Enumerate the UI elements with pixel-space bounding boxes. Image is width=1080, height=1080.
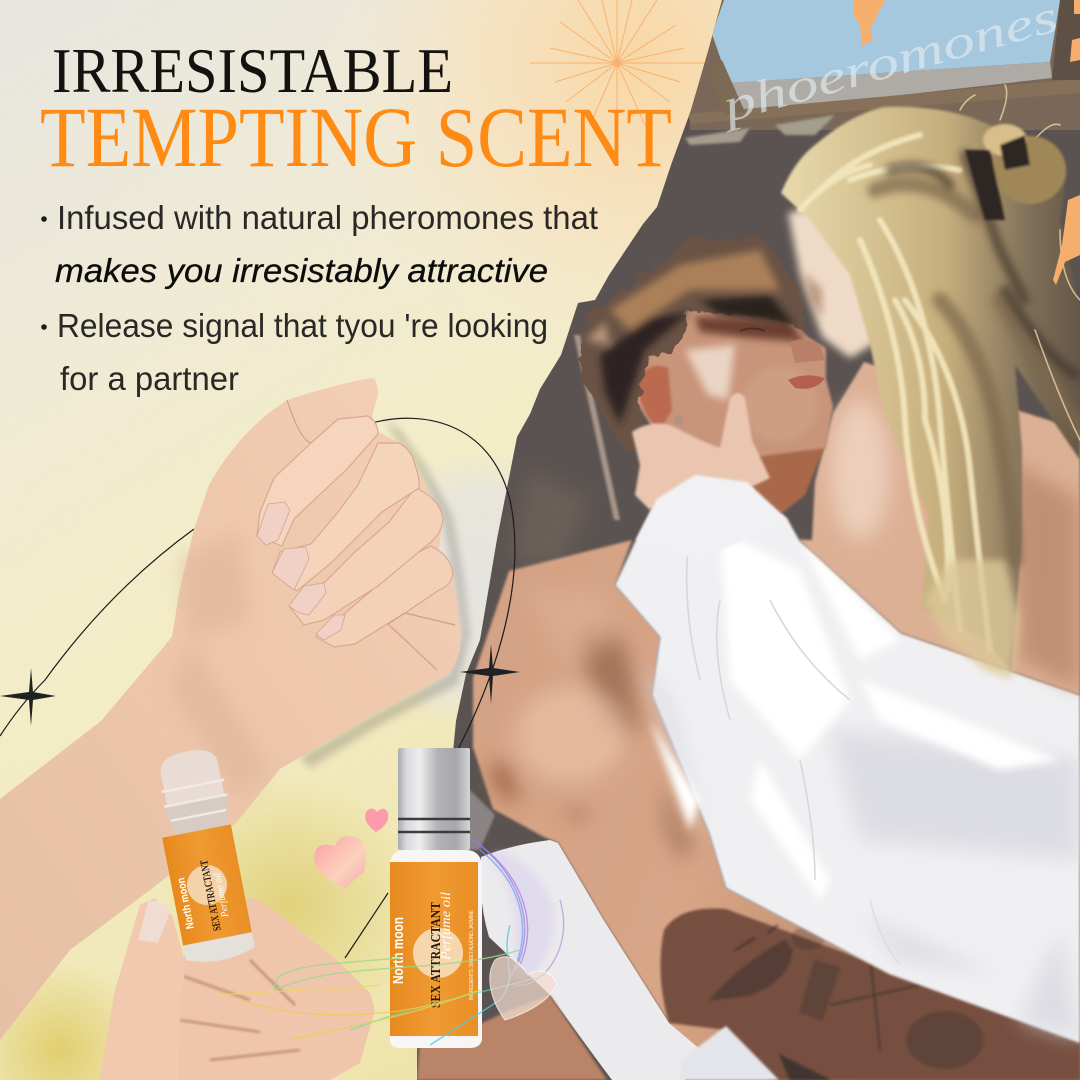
photo: robe collar over hand bbox=[636, 475, 788, 560]
photo: man's neck bbox=[752, 448, 825, 515]
holding hand: palm and fingers bbox=[100, 897, 375, 1080]
photo: hair bun bbox=[965, 124, 1066, 220]
fist: wrist shading bbox=[170, 530, 270, 800]
bottle: SEX ATTRACTANT: SEX ATTRACTANT bbox=[429, 901, 444, 1008]
bottle: peach circle bbox=[413, 928, 463, 978]
handwritten word: phoeromones: phoeromones bbox=[713, 0, 1063, 133]
photo: forearm tattoos bbox=[710, 925, 983, 1080]
fist: finger two bbox=[272, 443, 419, 591]
bullet list bbox=[41, 199, 598, 397]
roller bottle: roller ball bbox=[158, 746, 224, 806]
swirl glow bbox=[490, 850, 554, 980]
roller bottle: orange label bbox=[162, 824, 252, 946]
photo: woman's face bbox=[783, 206, 872, 362]
photo: sky window and beams bbox=[685, 0, 1080, 150]
product: main perfume bottle bbox=[390, 748, 482, 1048]
photo: man's ear and earring bbox=[638, 364, 684, 434]
decoration: black sparkle right bbox=[460, 644, 520, 704]
bottle: orange label bbox=[390, 862, 478, 1036]
photo: gray gap beside arm bbox=[468, 790, 496, 851]
photo: arm shading bbox=[488, 590, 695, 860]
scent swirl: rainbow lines bbox=[220, 838, 564, 1045]
roller bottle: label text: Perfume oil bbox=[212, 872, 232, 919]
icon: pink hearts bbox=[314, 808, 388, 888]
fist: finger one bbox=[257, 416, 378, 546]
photo: hair strands bbox=[800, 85, 1080, 650]
photo: dark wall bbox=[400, 0, 1080, 1080]
photo: hair ends over robe bbox=[925, 560, 1020, 680]
title line two: TEMPTING SCENT: TEMPTING SCENT bbox=[40, 89, 672, 185]
photo: man's body and arm bbox=[473, 540, 1080, 1080]
hand: closed fist and wrist bbox=[0, 378, 461, 1040]
photo: robe folds bbox=[640, 530, 1080, 1040]
fist: palm creases bbox=[287, 400, 455, 670]
decoration: black sparkle left bbox=[0, 668, 56, 726]
bottle: silver cap bbox=[398, 748, 470, 850]
bullet two text, first line: Release signal that tyou 're looking bbox=[57, 307, 548, 344]
photo: shadow on forearm bbox=[660, 908, 1080, 1080]
bullet one marker bbox=[41, 216, 47, 222]
photo: white robe bbox=[615, 475, 1080, 1043]
icon: translucent glass heart bbox=[490, 957, 556, 1020]
bottle: white body bbox=[390, 850, 482, 1048]
bullet two text, second line: for a partner bbox=[60, 360, 239, 397]
roller bottle: label text bbox=[173, 857, 234, 937]
fist: finger three bbox=[289, 488, 443, 625]
photo: hair highlights bbox=[586, 250, 795, 425]
photo: man's hair bbox=[581, 238, 806, 451]
photo: lighter pole at the left of the man bbox=[574, 335, 620, 520]
photo: face highlights bbox=[685, 316, 818, 443]
product: small roller bottle held in hand bbox=[100, 745, 375, 1080]
photo: man's face bbox=[635, 310, 833, 458]
photo: woman's back and shoulder bbox=[799, 362, 1080, 695]
photo: lower towel bbox=[417, 840, 779, 1080]
bottle: North moon: North moon bbox=[390, 917, 407, 984]
thumb nail bbox=[138, 900, 170, 943]
holding hand: finger creases bbox=[180, 960, 300, 1060]
roller bottle: label text: SEX ATTRACTANT bbox=[198, 858, 224, 932]
decoration: orange paint drips bbox=[853, 0, 1080, 285]
roller bottle: peach circle bbox=[184, 862, 230, 908]
roller bottle: rotated body bbox=[147, 745, 258, 967]
fist: fingernails bbox=[257, 502, 345, 640]
title line one: IRRESISTABLE: IRRESISTABLE bbox=[52, 35, 453, 106]
bottle: cap ridges bbox=[398, 819, 470, 832]
roller bottle: label text: North moon bbox=[175, 876, 197, 930]
decoration: orange starburst bbox=[530, 0, 705, 135]
roller bottle: glass base bbox=[183, 932, 256, 967]
photo: woman's blonde hair bbox=[781, 107, 1080, 671]
photo panel: couple embracing with torn paper edge bbox=[400, 0, 1080, 1080]
holding hand: thumb bbox=[100, 898, 186, 1080]
roller bottle: glass neck bbox=[164, 795, 233, 838]
bullet one text, second line: makes you irresistably attractive bbox=[55, 252, 548, 289]
photo: man's lips and nose bbox=[740, 328, 825, 389]
bottle: Perfume oil: Perfume oil bbox=[439, 892, 454, 961]
decoration: thin black curve lines bbox=[0, 418, 515, 1080]
bullet one text, first line: Infused with natural pheromones that bbox=[57, 199, 598, 236]
fist: finger four bbox=[316, 546, 453, 647]
bullet two marker bbox=[41, 324, 47, 330]
hand shadow bbox=[300, 420, 470, 768]
bottle: ingredients line: INGREDIENTS: SWEET ALMOND, JASMINE bbox=[469, 909, 475, 1000]
photo: woman's hand on man's face bbox=[632, 393, 770, 510]
